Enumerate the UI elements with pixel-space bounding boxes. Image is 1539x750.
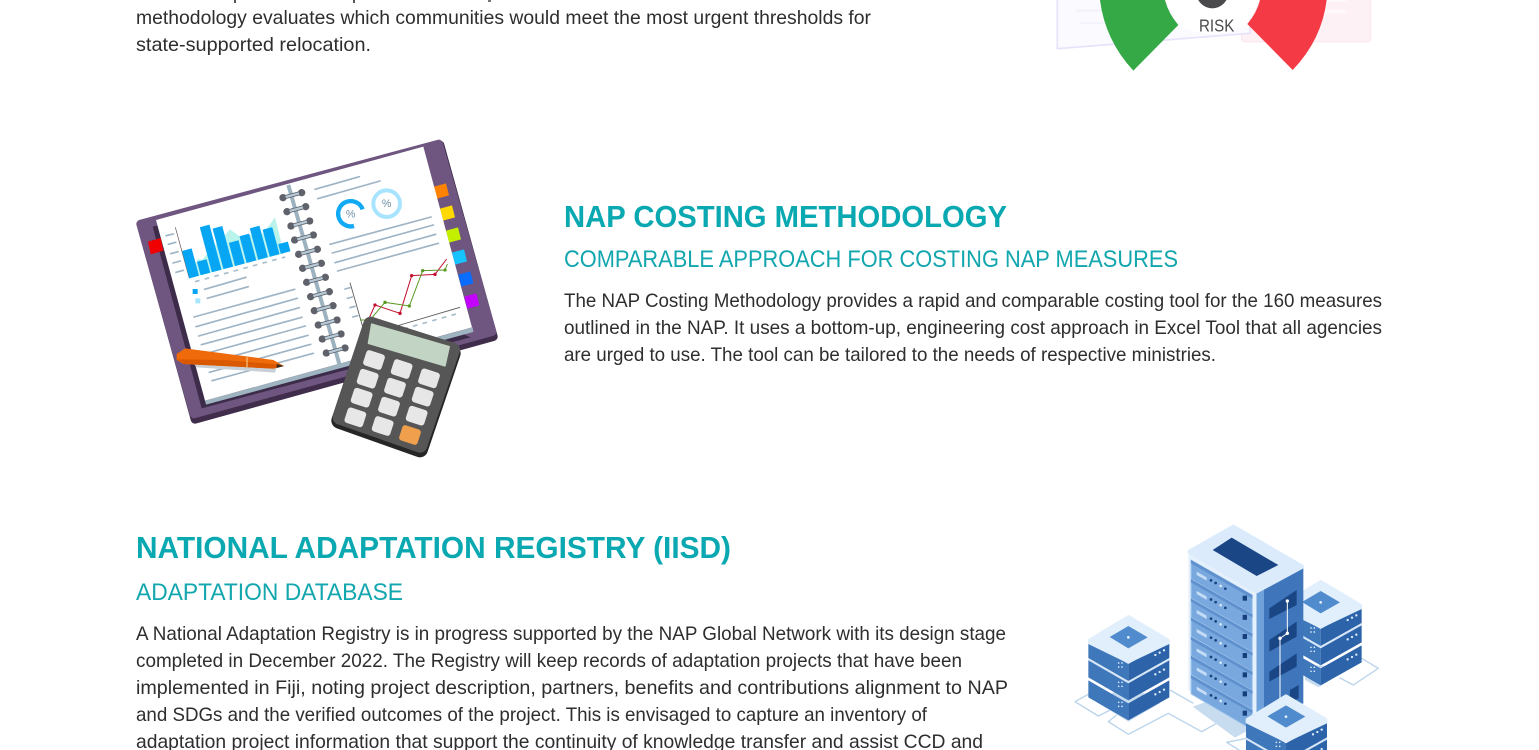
donut charts: % (346, 208, 356, 220)
text block: NAP costing body (564, 290, 1382, 366)
illustration: notebook with calculator (141, 144, 493, 449)
donut charts (338, 190, 400, 226)
donut charts: % (382, 198, 392, 210)
subheading: comparable approach: COMPARABLE APPROACH FOR COSTING NAP MEASURES (564, 246, 1178, 273)
right page text lines (315, 177, 438, 271)
heading: national adaptation registry: NATIONAL ADAPTATION REGISTRY (IISD) (136, 530, 731, 565)
text block: NAP costing body: are urged to use. The tool can be tailored to the needs of respective ministries. (564, 344, 1216, 366)
right server stack (1281, 581, 1362, 685)
front server stack (1246, 696, 1327, 750)
section: relocation methodology (top) (136, 0, 1371, 71)
illustration: data servers (1075, 527, 1378, 750)
section: NAP costing methodology (141, 144, 1382, 449)
text block: NAP costing body: The NAP Costing Methodology provides a rapid and comparable costing tool for the 160 measures (564, 290, 1382, 312)
notebook cover (141, 144, 493, 419)
text block: registry body: and SDGs and the verified outcomes of the project. This is envisaged to capture an inventory of (136, 704, 928, 726)
text block: relocation body: methodology evaluates which communities would meet the most urgent thresholds for (136, 7, 872, 29)
left server stack (1088, 616, 1169, 720)
text block: registry body: completed in December 2022. The Registry will keep records of adaptation projects that have been (136, 650, 962, 672)
line chart (345, 259, 460, 329)
label: RISK: RISK (1199, 16, 1235, 36)
index tabs (148, 183, 479, 309)
calculator (339, 324, 453, 449)
network lines (1075, 658, 1378, 750)
section: national adaptation registry (136, 527, 1378, 750)
text block: relocation body: state-supported relocation. (136, 34, 371, 56)
pen (177, 348, 284, 373)
subheading: adaptation database: ADAPTATION DATABASE (136, 579, 403, 606)
bar chart (166, 206, 290, 282)
spiral binding (279, 185, 349, 364)
legend and left page text lines (193, 277, 313, 381)
main server tower (1188, 527, 1303, 730)
text block: registry body: A National Adaptation Registry is in progress supported by the NAP Global Network with its design stage (136, 623, 1006, 645)
notebook pages (156, 147, 473, 405)
text block: registry body (136, 623, 1008, 750)
icon: risk gauge (1057, 0, 1371, 71)
heading: NAP costing methodology: NAP COSTING METHODOLOGY (564, 199, 1007, 234)
text block: registry body: implemented in Fiji, noting project description, partners, benefits and contributions alignment to NAP (136, 677, 1008, 699)
text block: relocation body (136, 0, 872, 56)
text block: NAP costing body: outlined in the NAP. It uses a bottom-up, engineering cost approach in Excel Tool that all agencies (564, 317, 1382, 339)
